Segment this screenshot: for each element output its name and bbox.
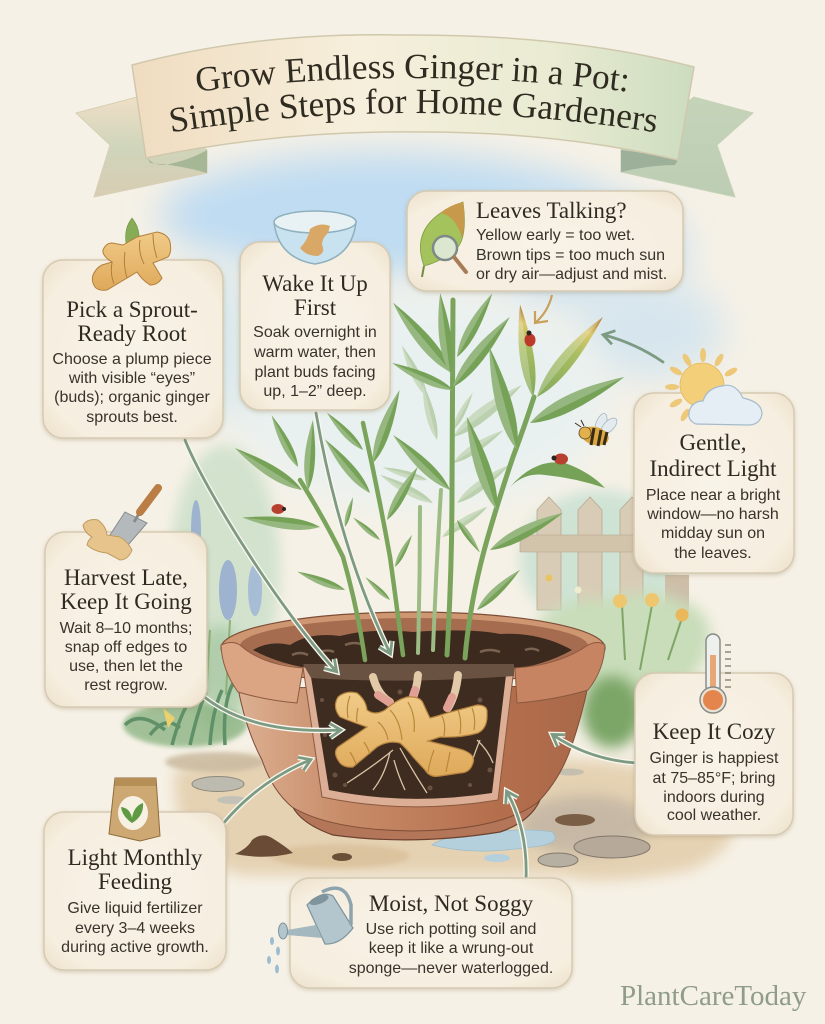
rhizome body	[335, 692, 487, 776]
panel: pick a root: Ready Root	[77, 321, 187, 346]
panel: wake it up: up, 1–2” deep.	[263, 383, 367, 400]
ladybugs	[272, 330, 568, 514]
pot rim back	[221, 612, 605, 684]
panel: moist not soggy	[290, 878, 572, 988]
panel: pick a root: Pick a Sprout-	[66, 297, 198, 322]
roots	[347, 740, 493, 793]
panel: harvest late: Wait 8–10 months;	[60, 620, 192, 637]
title line one: Grow Endless Ginger in a Pot:	[196, 54, 628, 92]
watermark: PlantCareToday	[620, 980, 807, 1012]
panel: harvest late: use, then let the	[69, 658, 183, 675]
panel: keep it cozy: Ginger is happiest	[650, 750, 779, 767]
sprout stalks	[373, 675, 458, 708]
panel: pick a root: with visible “eyes”	[68, 370, 195, 387]
icon: ginger root	[92, 218, 171, 290]
rhizome rings	[347, 696, 475, 772]
banner ribbon tails	[76, 97, 753, 197]
panel: harvest late: rest regrow.	[84, 677, 168, 694]
panel: harvest late: Harvest Late,	[64, 565, 188, 590]
green leaves	[232, 290, 628, 613]
panel: leaves talking: Yellow early = too wet.	[476, 227, 635, 244]
icon: fertilizer bag	[109, 778, 160, 841]
icon: thermometer	[700, 634, 731, 713]
plant	[232, 290, 628, 660]
panel: moist not soggy: keep it like a wrung-out	[369, 940, 534, 957]
terracotta pot	[221, 612, 605, 840]
panel: gentle light: Place near a bright	[646, 487, 781, 504]
panel: light monthly feeding: Light Monthly	[68, 845, 203, 870]
icon: watering can	[267, 888, 353, 974]
panel: keep it cozy: Keep It Cozy	[653, 719, 776, 744]
panel: light monthly feeding: Give liquid fertilizer	[67, 900, 203, 917]
panel: gentle light: Gentle,	[679, 430, 747, 455]
bee	[575, 412, 620, 448]
panel: light monthly feeding	[44, 812, 226, 970]
panel: moist not soggy: sponge—never waterlogged.	[349, 960, 553, 977]
ginger rhizome	[335, 675, 493, 793]
title banner	[75, 34, 754, 198]
icon: sun and cloud	[665, 348, 762, 425]
panel: harvest late: Keep It Going	[60, 589, 192, 614]
panel: gentle light: the leaves.	[674, 545, 752, 562]
cutaway frame	[303, 667, 514, 807]
panel: keep it cozy: at 75–85°F; bring	[653, 770, 775, 787]
panel: leaves talking	[407, 191, 683, 291]
browning leaves	[513, 304, 608, 402]
panel: pick a root	[43, 260, 223, 438]
panel: wake it up: First	[294, 295, 337, 320]
panel: pick a root: (buds); organic ginger	[54, 389, 210, 406]
pale background leaves	[378, 344, 525, 540]
panel: wake it up: Wake It Up	[262, 271, 368, 296]
panel: harvest late: snap off edges to	[65, 639, 187, 656]
panel: harvest late	[45, 532, 207, 707]
icon: leaf and magnifier	[420, 202, 466, 277]
panel: gentle light: midday sun on	[661, 525, 765, 542]
panel: light monthly feeding: every 3–4 weeks	[75, 920, 195, 937]
icon: trowel and ginger	[83, 488, 158, 560]
panel: moist not soggy: Moist, Not Soggy	[369, 891, 534, 916]
panel: moist not soggy: Use rich potting soil and	[366, 921, 536, 938]
panel: wake it up	[240, 242, 390, 410]
panel: leaves talking: Leaves Talking?	[476, 198, 627, 223]
panel: keep it cozy: cool weather.	[667, 807, 761, 824]
panel: light monthly feeding: during active growth.	[61, 939, 209, 956]
pot saucer	[290, 800, 540, 840]
stems	[300, 300, 534, 660]
panel: gentle light: window—no harsh	[646, 506, 779, 523]
panel: leaves talking: Brown tips = too much sun	[476, 247, 665, 264]
soil surface	[253, 630, 572, 670]
pot body	[238, 686, 588, 831]
panel: pick a root: sprouts best.	[86, 409, 178, 426]
title line two: Simple Steps for Home Gardeners	[170, 88, 656, 132]
pointer arrows	[185, 295, 663, 880]
banner body	[132, 35, 694, 160]
panel: keep it cozy	[635, 673, 793, 835]
panel: leaves talking: or dry air—adjust and mist.	[476, 266, 667, 283]
icon: glass bowl	[274, 211, 356, 264]
pot rim front	[221, 642, 303, 703]
watercolor sky	[160, 153, 725, 510]
garden left	[123, 445, 280, 747]
puddle	[432, 830, 555, 851]
panel: pick a root: Choose a plump piece	[52, 351, 212, 368]
panel: gentle light	[634, 393, 794, 573]
panel: wake it up: Soak overnight in	[253, 324, 377, 341]
fence and garden right	[515, 490, 710, 748]
panel: light monthly feeding: Feeding	[98, 869, 173, 894]
ground	[165, 752, 735, 880]
panel: gentle light: Indirect Light	[649, 456, 777, 481]
panel: wake it up: warm water, then	[253, 344, 376, 361]
panel: keep it cozy: indoors during	[663, 789, 765, 806]
panel: wake it up: plant buds facing	[255, 364, 375, 381]
cutaway soil	[311, 675, 506, 799]
